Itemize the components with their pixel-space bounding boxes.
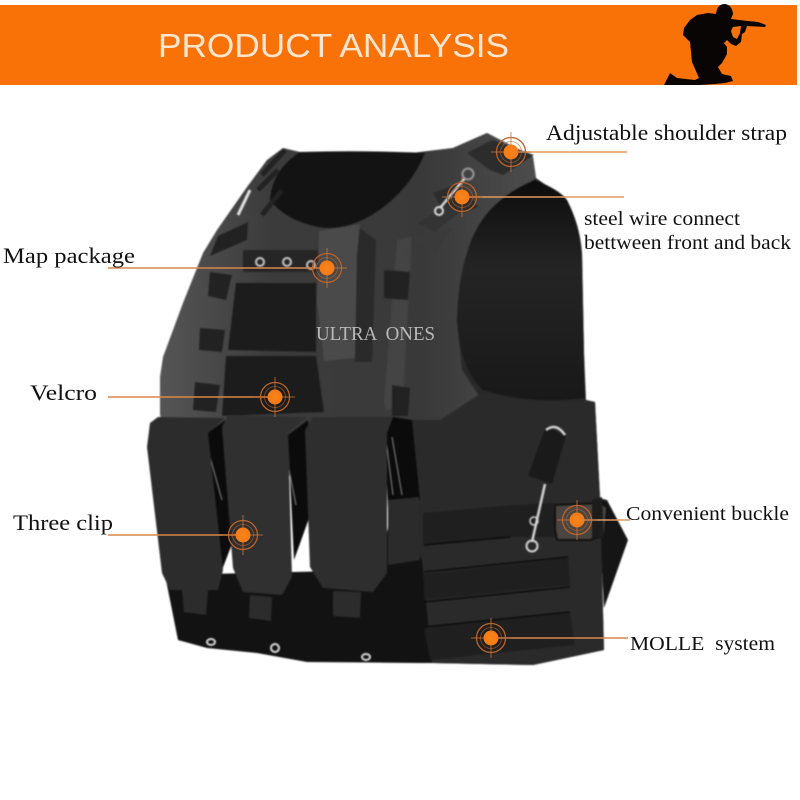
drain grommets — [207, 639, 370, 660]
callout: Velcro — [30, 377, 295, 417]
snap hook — [526, 427, 565, 552]
molle webbing rows — [423, 503, 575, 660]
webbing shadow lines — [424, 537, 570, 627]
callout: Velcro: Velcro — [30, 380, 97, 405]
panel: neck opening — [270, 151, 425, 228]
icon: kneeling soldier silhouette — [664, 4, 766, 85]
callout: Map package — [3, 243, 347, 288]
pouch flap left — [147, 417, 225, 590]
left molle straps — [193, 222, 410, 416]
header title: PRODUCT ANALYSIS — [158, 28, 509, 65]
callout: steel wire connect: steel wire connect — [584, 208, 740, 230]
vertical centre strap — [317, 224, 360, 361]
panel: vest side body — [395, 133, 604, 665]
steel wire connector — [435, 168, 474, 215]
panel: lower side body — [400, 392, 604, 665]
side elastic band — [388, 497, 420, 565]
callout: steel wire connect — [442, 177, 791, 254]
pouch flap middle — [222, 415, 307, 595]
callout: MOLLE system — [471, 618, 775, 658]
lower pouch bodies — [165, 490, 432, 663]
callout: Three clip: Three clip — [13, 510, 113, 535]
magazine highlights — [208, 437, 402, 505]
pouch flap right — [305, 417, 393, 592]
vertical centre strap shadow — [355, 226, 376, 362]
callout: MOLLE system: MOLLE system — [630, 633, 775, 655]
panel: back wing strap — [598, 498, 628, 608]
velcro panels — [222, 283, 324, 416]
buckle — [555, 503, 607, 540]
right front strap — [384, 236, 412, 412]
callout: Convenient buckle — [557, 500, 789, 540]
callout: Three clip — [13, 510, 263, 555]
pouch tabs — [182, 590, 361, 621]
vest illustration — [147, 133, 628, 665]
callout: Map package: Map package — [3, 243, 135, 268]
callout: Convenient buckle: Convenient buckle — [626, 503, 789, 525]
buckle strap to wing — [592, 497, 604, 538]
magazines between pouches — [205, 417, 420, 570]
eyelets — [256, 258, 315, 269]
side ring — [238, 190, 250, 215]
collar strap stitching — [258, 150, 285, 215]
watermark: ULTRA ONES — [316, 323, 435, 345]
map pocket zip band — [243, 250, 318, 272]
shoulder straps — [410, 140, 534, 252]
callout: Adjustable shoulder strap: Adjustable shoulder strap — [546, 120, 787, 145]
callout: Adjustable shoulder strap — [491, 120, 787, 172]
panel: vest front body — [160, 133, 536, 480]
header banner — [0, 5, 797, 85]
panel: armhole lining — [457, 180, 585, 400]
hanging pull tab — [528, 426, 566, 484]
callout: steel wire connect: bettween front and back — [584, 232, 791, 254]
